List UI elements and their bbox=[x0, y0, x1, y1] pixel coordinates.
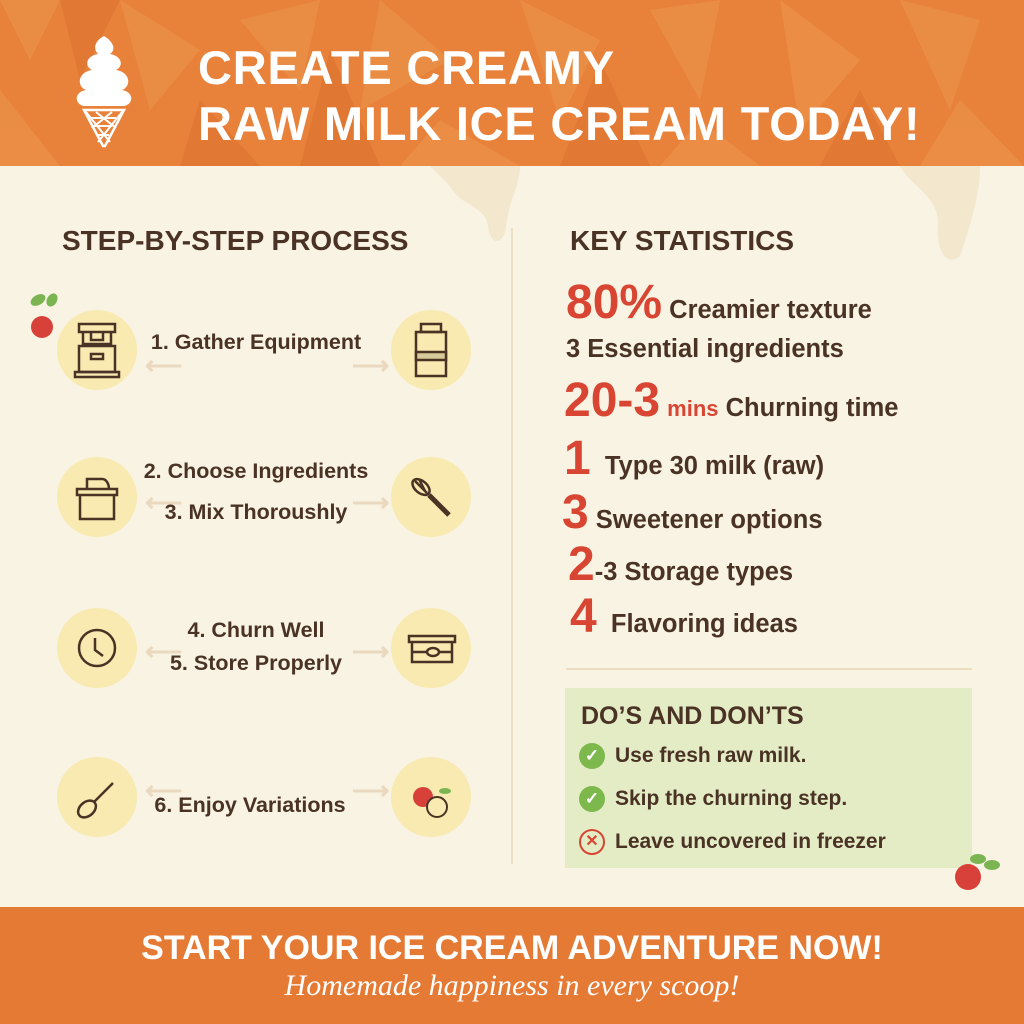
arrows: ⟵ bbox=[145, 775, 182, 805]
stat 80%: 80% Creamier texture bbox=[566, 276, 872, 329]
icon: container bbox=[57, 457, 137, 537]
icon: ice cream cone bbox=[76, 36, 132, 148]
arrows: ⟵ bbox=[145, 350, 182, 380]
footer headline: START YOUR ICE CREAM ADVENTURE NOW! bbox=[141, 929, 883, 967]
icon: clock bbox=[57, 608, 137, 688]
step row 3: ⟶ bbox=[352, 636, 389, 666]
section divider bbox=[511, 228, 513, 864]
stat 3 ingredients: 3 Essential ingredients bbox=[566, 335, 844, 363]
step text bbox=[170, 618, 342, 675]
stat flavoring: 4 Flavoring ideas bbox=[570, 590, 798, 643]
item 3: ✕ bbox=[585, 833, 599, 850]
heading: key statistics: KEY STATISTICS bbox=[570, 225, 794, 256]
heading: step-by-step: STEP-BY-STEP PROCESS bbox=[62, 225, 408, 256]
step text: 5. Store Properly bbox=[170, 651, 342, 675]
stat sweetener: 3 Sweetener options bbox=[562, 486, 822, 539]
panel: statistics bbox=[562, 276, 898, 643]
heading: DO’S AND DON’TS bbox=[581, 702, 804, 730]
icon: tomato bottom right bbox=[955, 854, 1000, 890]
step row 1 bbox=[57, 310, 471, 390]
step text: 2. Choose Ingredients bbox=[144, 459, 368, 483]
item 1: ✓ bbox=[585, 746, 599, 765]
icon: milk jar bbox=[391, 310, 471, 390]
icon: storage tub bbox=[391, 608, 471, 688]
stat storage: 2-3 Storage types bbox=[568, 538, 793, 591]
arrows: ⟵ bbox=[145, 636, 182, 666]
stat churning: 20-3 mins Churning time bbox=[564, 374, 898, 427]
decorative drips bbox=[430, 166, 980, 260]
header band bbox=[0, 0, 1024, 166]
step row 2 bbox=[57, 457, 471, 537]
title bbox=[198, 41, 920, 150]
step row 3 bbox=[57, 608, 471, 688]
step text: 4. Churn Well bbox=[188, 618, 324, 642]
item 2: Skip the churning step. bbox=[615, 787, 847, 810]
item 3: Leave uncovered in freezer bbox=[615, 830, 886, 853]
icon: tomato bbox=[30, 293, 58, 338]
item 1: Use fresh raw milk. bbox=[615, 744, 806, 767]
icon: spoon bbox=[57, 757, 137, 837]
icon: fruit bbox=[391, 757, 471, 837]
step text: 3. Mix Thoroushly bbox=[165, 500, 347, 524]
step row 4 bbox=[57, 757, 471, 837]
step text: 1. Gather Equipment bbox=[151, 330, 361, 354]
icon: ice cream machine bbox=[57, 310, 137, 390]
title: CREATE CREAMY bbox=[198, 41, 615, 94]
arrows: ⟵ bbox=[145, 487, 182, 517]
step row 4: ⟶ bbox=[352, 775, 389, 805]
panel: steps decoration bbox=[30, 293, 58, 338]
panel: do's and don'ts bbox=[565, 688, 972, 868]
step row 2: ⟶ bbox=[352, 487, 389, 517]
stat milk: 1 Type 30 milk (raw) bbox=[564, 432, 824, 485]
footer tagline: Homemade happiness in every scoop! bbox=[285, 969, 739, 1002]
step row 1: ⟶ bbox=[352, 350, 389, 380]
item 2: ✓ bbox=[585, 789, 599, 808]
icon: whisk bbox=[391, 457, 471, 537]
step text bbox=[144, 459, 368, 524]
step text: 6. Enjoy Variations bbox=[154, 793, 346, 817]
footer band bbox=[0, 907, 1024, 1024]
title: RAW MILK ICE CREAM TODAY! bbox=[198, 97, 920, 150]
